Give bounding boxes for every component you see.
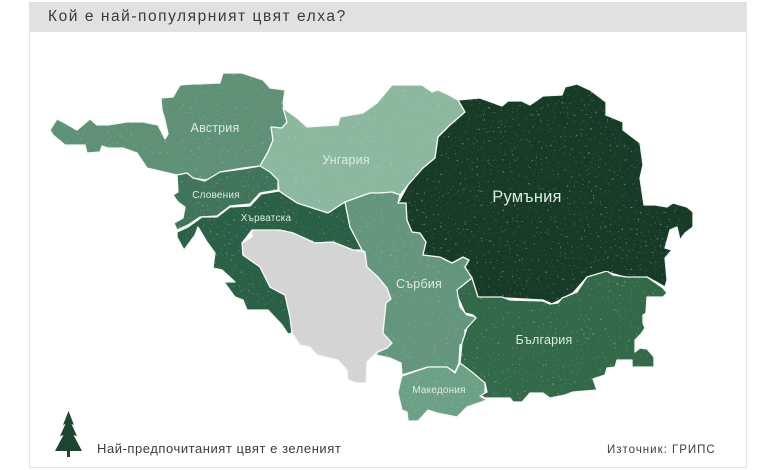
region: Македония: [398, 363, 487, 421]
region: Унгария: [260, 85, 465, 213]
region: Румъния: Румъния: [492, 188, 562, 206]
region: Сърбия: Сърбия: [396, 277, 442, 291]
region: Австрия: [50, 73, 287, 180]
source: Източник: ГРИПС: [607, 444, 716, 456]
region: България: България: [516, 333, 572, 347]
region: Хърватска: [177, 191, 362, 334]
icon: pine tree: [55, 411, 82, 457]
region: grey, no data: [242, 230, 392, 383]
region: Македония: Македония: [412, 385, 466, 396]
region: Австрия: Австрия: [191, 121, 239, 135]
region: Румъния: [398, 84, 693, 304]
region: Словения: Словения: [192, 190, 240, 201]
region: Сърбия: [345, 192, 476, 375]
legend note: Най-предпочитаният цвят е зеленият: [97, 441, 341, 456]
region: Хърватска: Хърватска: [241, 213, 291, 224]
title: Кой е най-популярният цвят елха?: [48, 8, 347, 25]
region: Унгария: Унгария: [322, 153, 370, 167]
region: България: [457, 271, 667, 402]
title bar: [29, 2, 746, 32]
region: Словения: [173, 166, 278, 230]
